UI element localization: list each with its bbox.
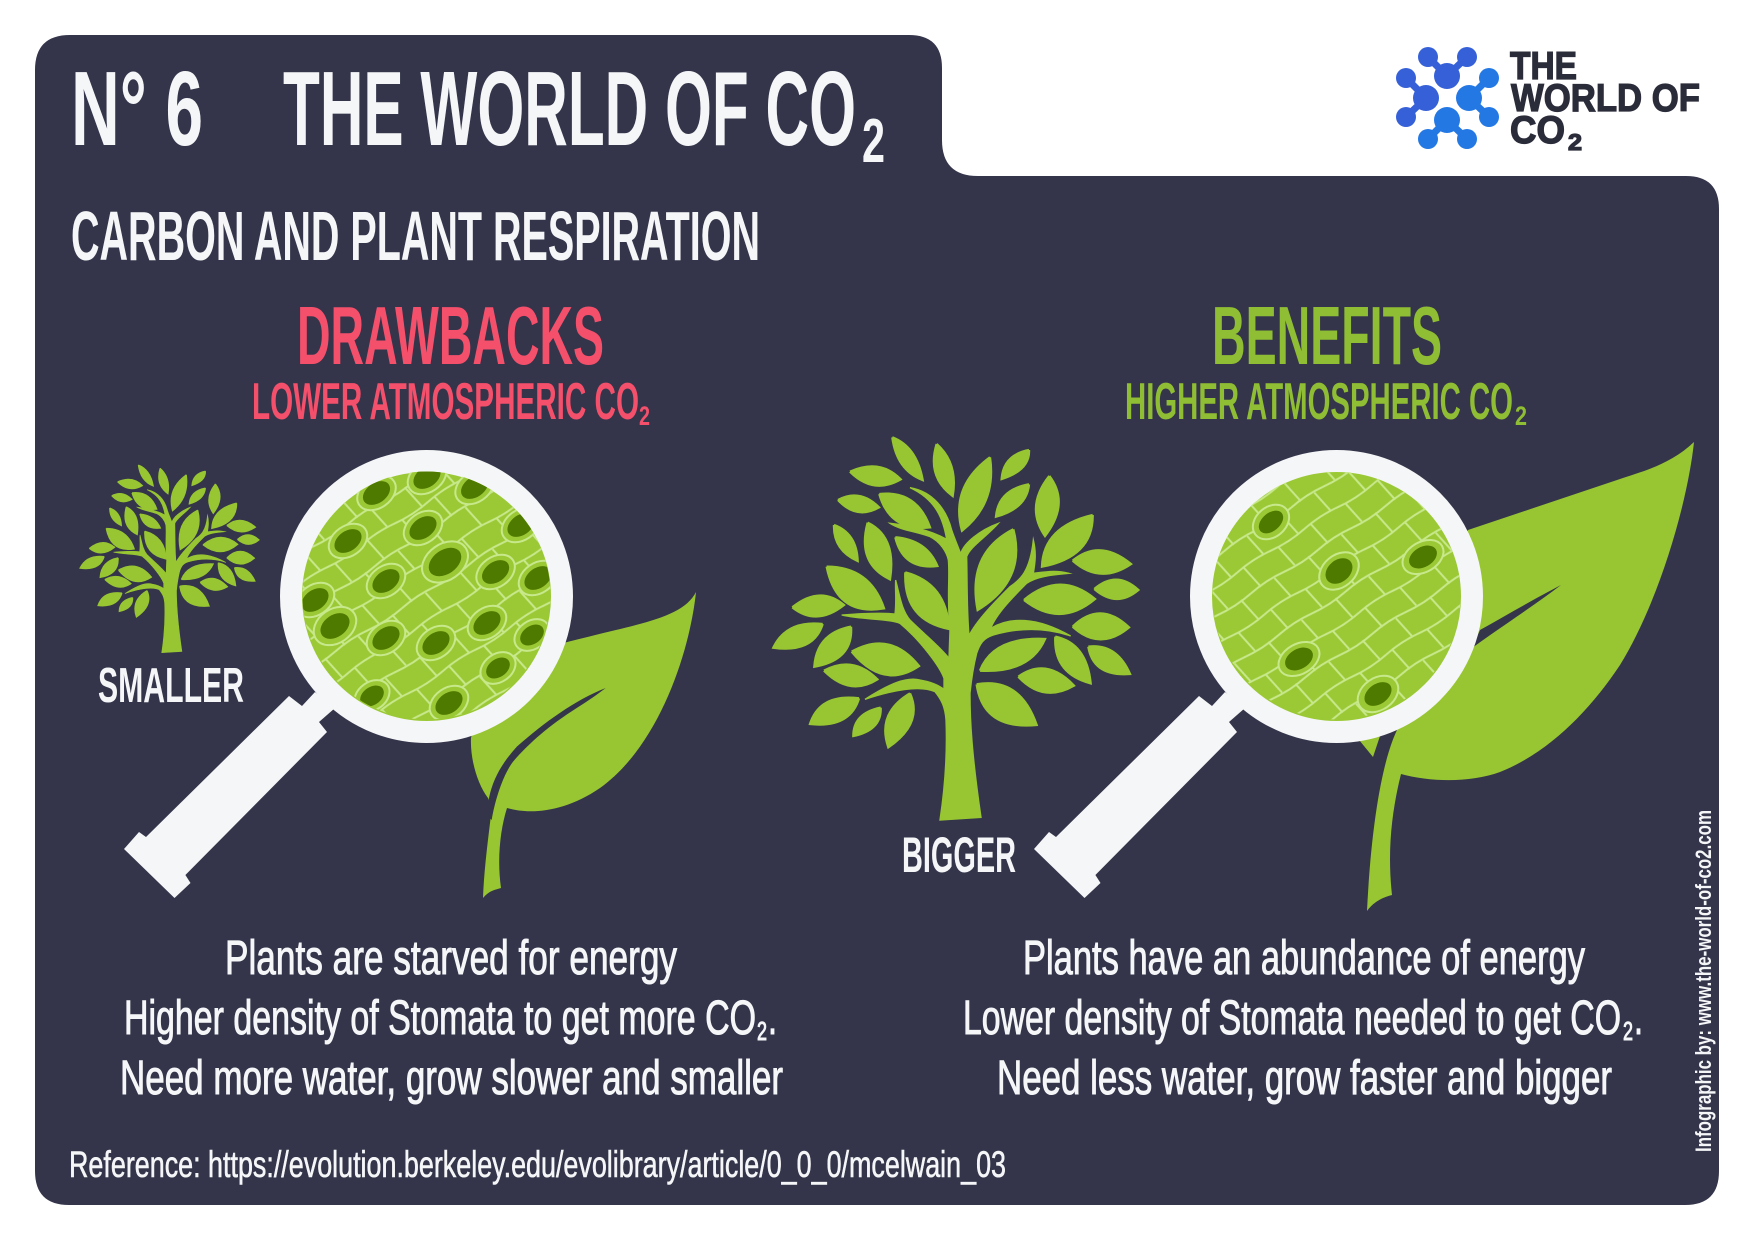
logo wordmark	[1510, 45, 1700, 155]
subtitle: CARBON AND PLANT RESPIRATION	[71, 197, 760, 275]
lens: dense stomata	[302, 472, 550, 720]
logo wordmark: 2	[1568, 129, 1582, 155]
logo wordmark: THE	[1510, 45, 1577, 88]
magnifier ring	[1201, 461, 1472, 732]
text block: drawbacks explanation: Plants are starved for energy	[225, 932, 677, 985]
magnifier ring	[291, 461, 562, 732]
icon: big tree	[773, 437, 1138, 820]
icon: right magnifier with sparse stomata	[1034, 461, 1472, 898]
vertical credit: Infographic by: www.the-world-of-co2.com	[1691, 810, 1716, 1152]
text block: benefits explanation: .	[1634, 992, 1643, 1045]
heading: lower atmospheric CO2: 2	[639, 401, 650, 431]
lens: sparse stomata	[1210, 470, 1465, 722]
heading: higher atmospheric CO2: 2	[1515, 401, 1527, 431]
heading: higher atmospheric CO2	[1125, 373, 1527, 431]
heading: benefits: BENEFITS	[1212, 289, 1442, 382]
text block: drawbacks explanation: Higher density of Stomata to get more CO	[124, 992, 756, 1045]
logo wordmark: CO	[1510, 109, 1565, 152]
heading: lower atmospheric CO2	[252, 373, 650, 431]
text block: benefits explanation: 2	[1623, 1016, 1633, 1046]
heading: drawbacks: DRAWBACKS	[297, 289, 604, 382]
icon: left leaf	[471, 592, 696, 898]
text block: drawbacks explanation: .	[768, 992, 777, 1045]
label: bigger: BIGGER	[902, 827, 1016, 883]
heading: lower atmospheric CO2: LOWER ATMOSPHERIC CO	[252, 373, 639, 431]
icon: right leaf	[1355, 442, 1694, 911]
title	[71, 50, 885, 176]
text block: drawbacks explanation: 2	[757, 1016, 767, 1046]
title: N° 6	[71, 50, 203, 168]
icon: molecule network	[1396, 47, 1499, 149]
title: THE WORLD OF CO	[283, 50, 856, 168]
label: smaller: SMALLER	[98, 659, 244, 713]
logo: The World of CO2	[1396, 45, 1700, 155]
logo wordmark: WORLD OF	[1511, 77, 1700, 120]
icon: left magnifier with dense stomata	[124, 453, 564, 898]
text block: drawbacks explanation	[120, 932, 783, 1105]
reference line: Reference: https://evolution.berkeley.edu/evolibrary/article/0_0_0/mcelwain_03	[69, 1144, 1006, 1185]
title: 2	[862, 107, 885, 176]
text block: drawbacks explanation: Need more water, grow slower and smaller	[120, 1052, 783, 1105]
magnifier handle	[1034, 692, 1245, 898]
icon: small tree	[80, 465, 259, 653]
magnifier handle	[124, 692, 335, 898]
text block: benefits explanation	[963, 932, 1643, 1105]
